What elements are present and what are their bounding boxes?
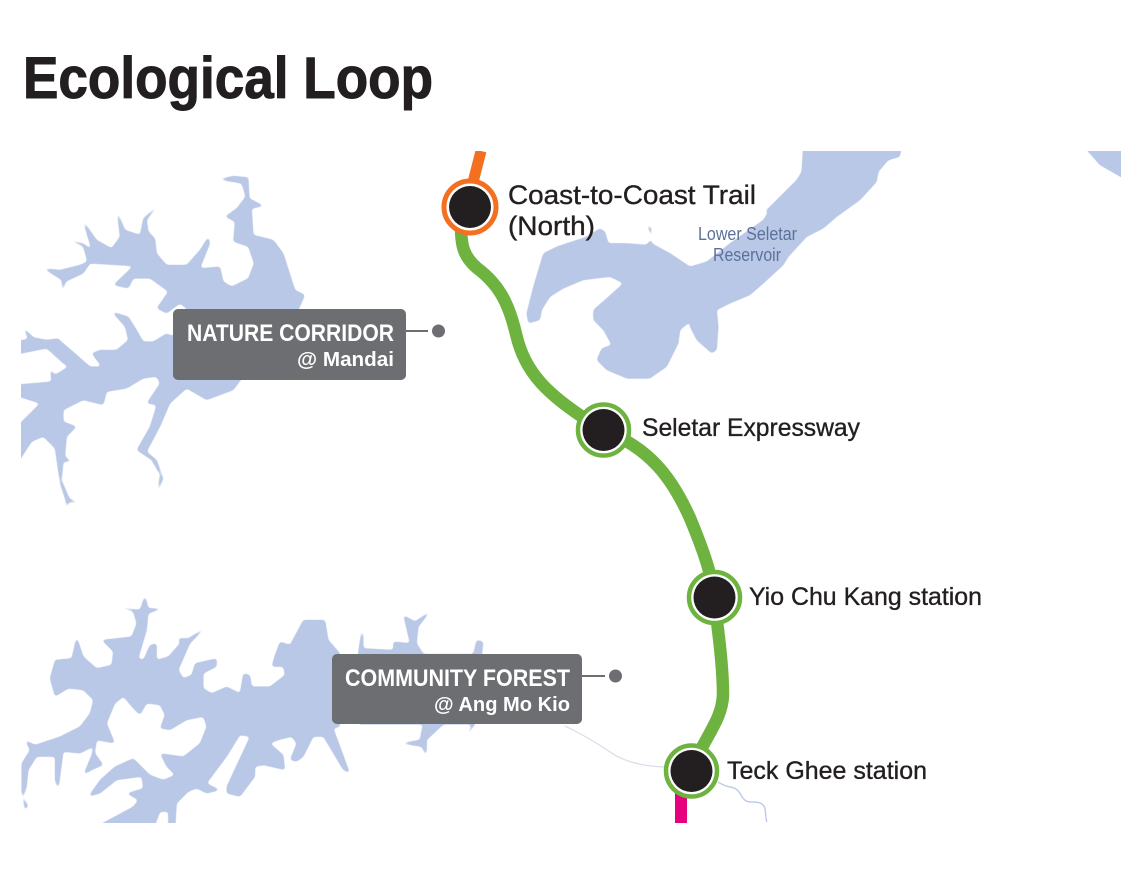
thin streams <box>565 726 767 822</box>
label: Lower Seletar Reservoir <box>698 224 797 265</box>
station: Coast-to-Coast Trail (North): (North) <box>508 211 595 241</box>
water bodies <box>13 140 1135 830</box>
callout: Community Forest at Ang Mo Kio <box>332 654 622 724</box>
callout: Community Forest at Ang Mo Kio: COMMUNITY FOREST <box>345 665 570 692</box>
station: Yio Chu Kang station <box>689 572 982 623</box>
station: Teck Ghee station <box>666 746 927 796</box>
orange route segment <box>471 151 481 190</box>
callout: Nature Corridor at Mandai <box>173 309 445 380</box>
label: Lower Seletar Reservoir: Reservoir <box>713 245 781 265</box>
callout: Nature Corridor at Mandai: @ Mandai <box>297 349 394 371</box>
label: Lower Seletar Reservoir: Lower Seletar <box>698 224 797 244</box>
reservoir: Ang Mo Kio eastern fingers <box>357 610 483 757</box>
reservoir: Lower Peirce / Ang Mo Kio <box>22 595 350 830</box>
green ecological loop route <box>461 225 723 770</box>
reservoir: Lower Seletar <box>527 143 902 378</box>
title: Ecological Loop <box>23 46 433 111</box>
route lines <box>461 151 723 823</box>
station: Yio Chu Kang station: Yio Chu Kang station <box>749 583 982 611</box>
station: Coast-to-Coast Trail (North): Coast-to-Coast Trail <box>508 180 756 210</box>
callout: Community Forest at Ang Mo Kio: @ Ang Mo Kio <box>434 694 570 716</box>
reservoir: top-right corner <box>1087 151 1121 178</box>
pink route segment <box>675 790 687 823</box>
station: Coast-to-Coast Trail (North) <box>444 180 756 241</box>
station: Seletar Expressway: Seletar Expressway <box>642 414 860 442</box>
reservoir: Upper Seletar west arm at Mandai <box>13 176 305 511</box>
callout: Nature Corridor at Mandai: NATURE CORRIDOR <box>187 320 394 347</box>
station: Teck Ghee station: Teck Ghee station <box>727 757 927 785</box>
station: Seletar Expressway <box>578 404 860 456</box>
